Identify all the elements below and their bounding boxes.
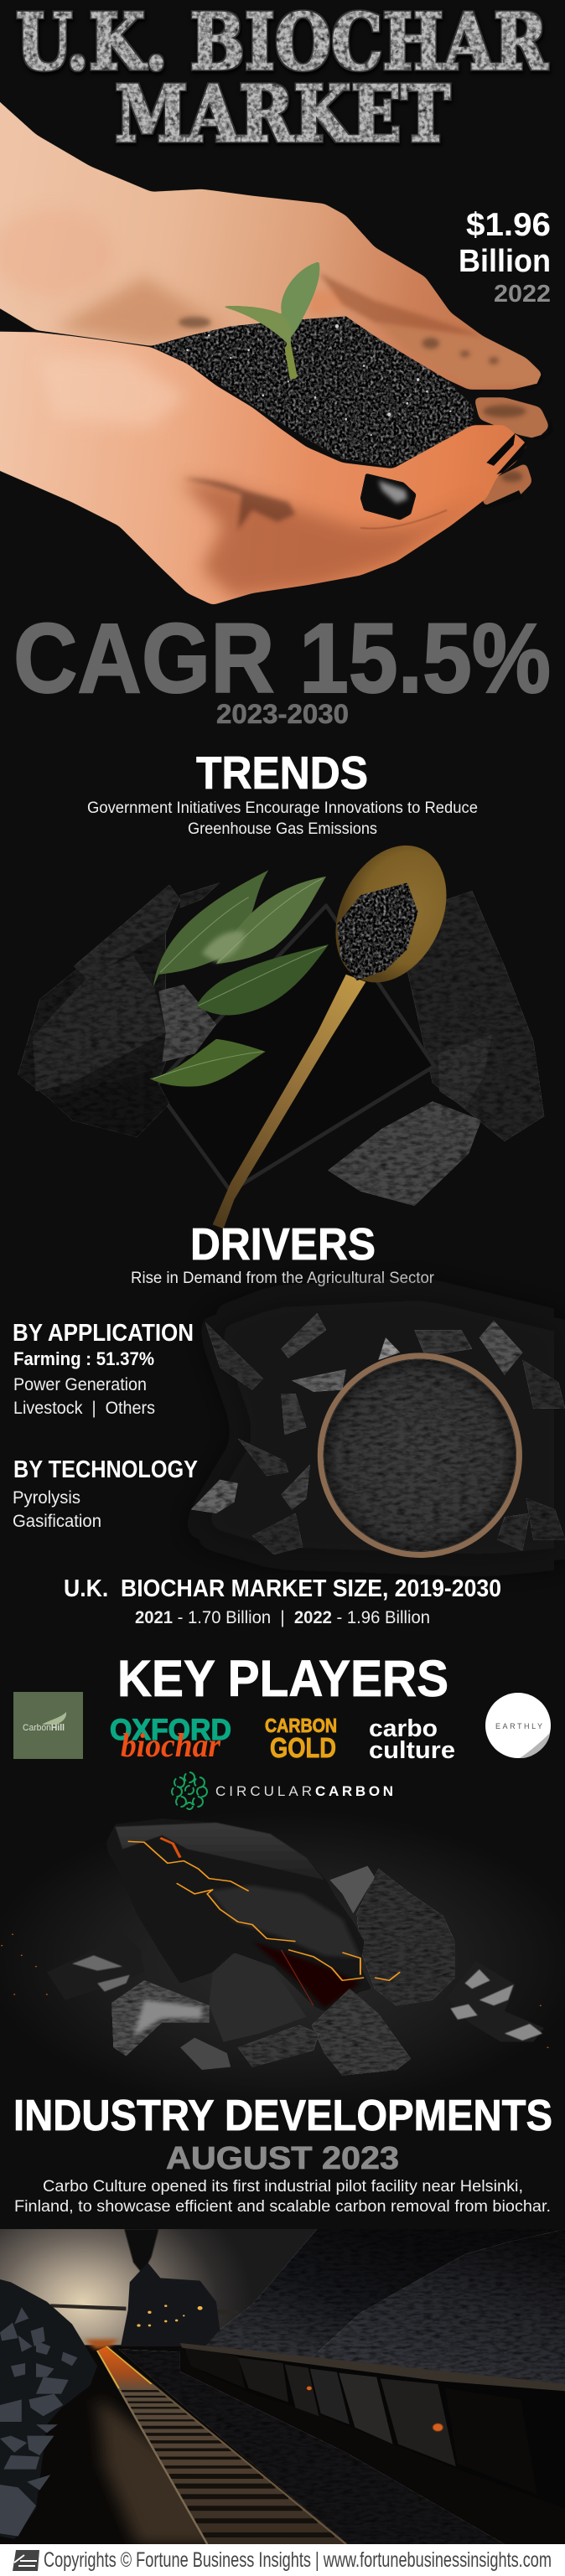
logo: Carbon Hill: CarbonHill [23,1723,65,1733]
industry developments block: Finland, to showcase efficient and scalable carbon removal from biochar. [14,2198,551,2216]
by application segment list [13,1320,194,1418]
main rock [106,1818,371,2011]
trends block: Greenhouse Gas Emissions [188,820,377,838]
image: glowing lava coal rocks [0,1810,565,2112]
lower hand [0,331,528,605]
logo: Oxford Biochar: OXFORD [110,1714,231,1746]
biochar powder in bowl [324,1359,516,1551]
drivers block: Rise in Demand from the Agricultural Sector [131,1270,435,1287]
industry developments block: Carbo Culture opened its first industrial pilot facility near Helsinki, [43,2178,523,2196]
left charcoal pieces [18,882,220,1137]
ground [0,2345,565,2544]
market size heading and values: 2021 - 1.70 Billion | 2022 - 1.96 Billion [135,1608,430,1627]
image: charcoal shards and bowl of biochar [188,1289,565,1565]
smoke plume [124,2229,158,2273]
by technology segment list: Pyrolysis [13,1488,80,1508]
biochar soil mound [152,317,474,467]
by application segment list: Farming : 51.37% [13,1348,154,1369]
logo: Oxford Biochar [110,1714,231,1764]
footer copyright bar [0,2544,565,2576]
market size callout: 2022 [494,281,551,308]
trackside ground slope [119,2349,505,2544]
market size heading and values: U.K. BIOCHAR MARKET SIZE, 2019-2030 [64,1575,501,1602]
dusk sky [0,2229,324,2349]
logo: Oxford Biochar: biochar [121,1726,220,1764]
coal pile [0,2279,97,2539]
seedling [220,261,319,380]
title: U.K. Biochar Market [16,0,547,159]
charcoal shards [191,1313,565,1554]
wooden bowl [320,1356,519,1554]
by technology segment list [13,1456,198,1531]
drivers block [131,1219,435,1287]
by application segment list: Power Generation [13,1375,147,1394]
dirt on fingers [179,317,526,482]
rail wagons [180,2343,565,2508]
by technology segment list: BY TECHNOLOGY [13,1456,198,1483]
gold spoon [213,820,469,1229]
key players heading: KEY PLAYERS [117,1650,448,1707]
industry developments block: AUGUST 2023 [166,2141,399,2176]
logo: Circular Carbon: CARBON [315,1783,393,1799]
ember specks [1,1933,549,2048]
logo: Carbo Culture [369,1715,455,1764]
dusty ground [97,2397,252,2544]
image: coal yard with railway [0,2229,565,2544]
icon: Fortune Business Insights logo [13,2550,39,2571]
logo: Carbo Culture: carbo [369,1715,438,1742]
logo: Earthly [485,1693,551,1758]
hero image: hands holding biochar and a seedling [0,89,553,605]
logo: Earthly: EARTHLY [495,1722,542,1730]
title: U.K. Biochar Market: MARKET [115,69,450,159]
right charcoal pieces [328,891,544,1206]
conveyor bridges [50,2304,239,2314]
market size callout: Billion [459,244,551,279]
lower rocks [111,1980,411,2076]
by technology segment list: Gasification [13,1512,101,1531]
tray with biochar powder [155,906,434,1191]
market size heading and values [64,1575,501,1627]
by application segment list: BY APPLICATION [13,1320,194,1347]
behind rocks [209,1866,455,2042]
upper hand [0,89,550,506]
logo: Carbon Gold [265,1715,337,1763]
drivers block: DRIVERS [190,1219,376,1270]
black painted nails [360,372,553,520]
scattered left and right rocks [47,1933,544,2042]
logo: Circular Carbon: CIRCULAR [215,1783,312,1799]
by application segment list: Livestock | Others [13,1399,155,1418]
railway track [85,2340,346,2544]
white specks in soil [186,324,451,436]
factory [121,2263,220,2346]
logo: Circular Carbon [172,1772,393,1809]
image: charcoal, leaves and gold spoon [18,820,544,1229]
market size callout [459,207,551,308]
coal mountains [200,2229,565,2397]
logo: Carbo Culture: culture [369,1737,455,1764]
trends block: TRENDS [196,747,368,799]
green leaves [149,870,329,1087]
lava cracks [128,1838,400,2005]
trends block: Government Initiatives Encourage Innovations to Reduce [87,799,478,817]
industry developments block [13,2092,552,2216]
logo: Carbon Gold: GOLD [270,1732,336,1763]
trends block [87,747,478,838]
CAGR heading: 2023-2030 [216,699,349,729]
logo: Carbon Hill [13,1692,83,1759]
market size callout: $1.96 [466,207,551,243]
logo: Carbon Gold: CARBON [265,1715,337,1736]
